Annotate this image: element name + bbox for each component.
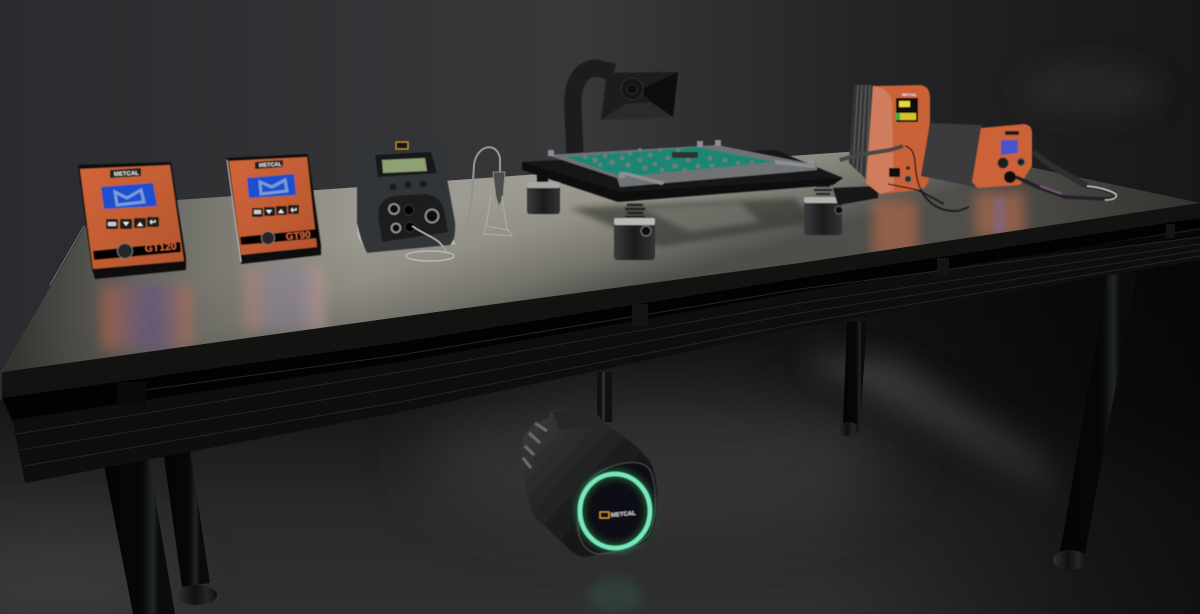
dispenser LCD <box>382 158 427 173</box>
device: fluid dispenser <box>357 138 455 253</box>
device: GT90 controller <box>226 154 321 264</box>
hose <box>573 68 614 155</box>
GT120 buttons <box>106 217 159 229</box>
fixture plate <box>522 145 843 202</box>
station connectors <box>889 166 912 182</box>
table legs <box>102 272 1137 614</box>
leg: front left <box>102 455 175 614</box>
horn <box>601 72 678 120</box>
foot: front <box>614 205 655 260</box>
dispenser logo <box>396 142 408 149</box>
GT90 label band: GT90 <box>285 230 312 243</box>
GT120 label band: GT120 <box>144 240 177 255</box>
station body <box>866 85 930 194</box>
hot air knobs <box>998 158 1024 183</box>
leg: rear left <box>163 450 217 605</box>
device: soldering station <box>833 85 969 211</box>
pump logo <box>600 511 636 519</box>
table reflections <box>102 192 1025 349</box>
foot: rear right <box>804 186 843 235</box>
station screen: METCAL <box>902 93 917 97</box>
device: GT120 controller <box>78 162 186 279</box>
device: hot air station <box>921 123 1116 200</box>
leg: rear middle <box>837 322 867 436</box>
heatsink fins <box>849 85 880 192</box>
dispenser buttons <box>390 180 426 190</box>
iron holder <box>833 186 878 205</box>
PCB board <box>565 147 775 177</box>
table apron rails <box>2 218 1200 483</box>
dispenser connector panel <box>378 194 448 242</box>
GT90 logo: METCAL <box>259 162 283 169</box>
stand <box>484 196 512 236</box>
fixture clamps <box>548 140 815 185</box>
syringe <box>493 172 505 206</box>
leg: pump pole <box>597 372 612 422</box>
GT90 screen <box>247 174 296 198</box>
hot air hoses <box>1016 152 1116 200</box>
fluid tubing and syringe stand <box>406 147 512 261</box>
leg: front right <box>1053 272 1137 570</box>
pump front face <box>578 462 656 554</box>
device: fume extractor pump <box>521 408 657 557</box>
pump logo: METCAL <box>611 511 636 519</box>
GT120 logo: METCAL <box>114 171 139 178</box>
GT120 screen <box>101 183 157 209</box>
foot: rear left <box>527 172 560 214</box>
device: rework hood and PCB fixture <box>522 68 843 260</box>
glowing ring <box>580 474 650 548</box>
hot air logo <box>1005 131 1019 135</box>
GT90 buttons <box>252 205 299 217</box>
pump floor reflection <box>587 577 643 613</box>
hot air screen <box>1001 140 1018 155</box>
floor <box>0 230 1200 614</box>
table top <box>2 146 1200 398</box>
soldering iron and cable <box>840 146 903 160</box>
